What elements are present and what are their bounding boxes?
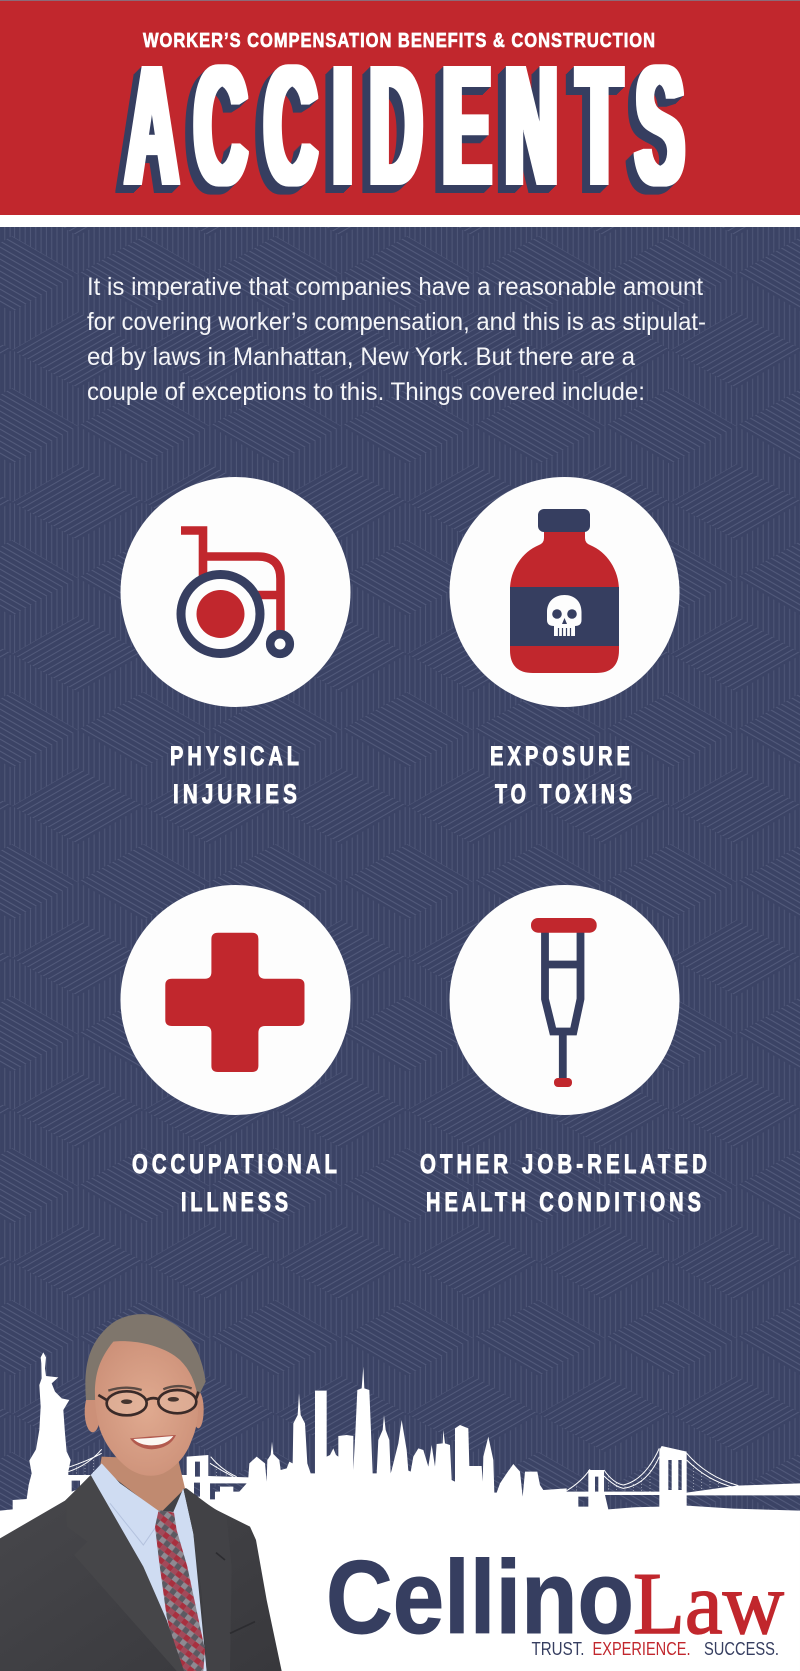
circle: exposure to toxins [450, 477, 680, 707]
pocket and notch [216, 1553, 255, 1633]
left lapel [66, 1475, 184, 1671]
intro paragraph: for covering worker’s compensation, and this is as stipulat- [87, 308, 706, 336]
label: other conditions: OTHER JOB-RELATED [420, 1149, 711, 1179]
panel: exposure to toxins [450, 477, 680, 809]
header band [0, 0, 800, 227]
tagline: SUCCESS. [704, 1638, 779, 1659]
icon: skull [547, 595, 582, 636]
label: occupational illness: OCCUPATIONAL [132, 1149, 341, 1179]
face [95, 1341, 198, 1476]
logo: Cellino Law [326, 1540, 784, 1659]
teeth [133, 1436, 173, 1445]
label: physical injuries: PHYSICAL [170, 741, 303, 771]
intro paragraph: couple of exceptions to this. Things covered include: [87, 378, 645, 406]
suit [0, 1475, 282, 1671]
hair [85, 1314, 206, 1400]
intro paragraph [87, 273, 706, 406]
circle: physical injuries [120, 477, 350, 707]
title: ACCIDENTS: ACCIDENTS [126, 31, 684, 220]
eyes [121, 1397, 179, 1404]
right lapel [183, 1488, 232, 1671]
label: physical injuries [170, 741, 303, 809]
circle: other conditions [450, 885, 680, 1115]
icon: medical cross [165, 933, 304, 1072]
glasses [98, 1390, 198, 1415]
neck [100, 1457, 185, 1513]
icon: poison bottle [510, 509, 619, 673]
collar edge [110, 1503, 156, 1545]
label: other conditions [420, 1149, 711, 1217]
icon: wheelchair [181, 530, 290, 654]
shirt [91, 1463, 207, 1671]
tie [155, 1510, 205, 1671]
ear left [85, 1391, 101, 1432]
panel: other job-related health conditions [420, 885, 711, 1217]
wordmark Law: Law [633, 1556, 784, 1653]
portrait: attorney illustration [0, 1314, 282, 1671]
circle: occupational illness [120, 885, 350, 1115]
label: other conditions: HEALTH CONDITIONS [426, 1187, 705, 1217]
icon: crutch [531, 918, 597, 1087]
label: exposure to toxins: TO TOXINS [495, 779, 636, 809]
label: occupational illness: ILLNESS [181, 1187, 292, 1217]
tagline: EXPERIENCE. [592, 1638, 690, 1659]
wordmark Cellino: Cellino [326, 1540, 634, 1656]
mouth [130, 1435, 176, 1449]
label: exposure to toxins [490, 741, 636, 809]
intro paragraph: It is imperative that companies have a reasonable amount [87, 273, 703, 301]
panel: occupational illness [120, 885, 350, 1217]
label: physical injuries: INJURIES [173, 779, 301, 809]
intro paragraph: ed by laws in Manhattan, New York. But there are a [87, 343, 635, 371]
subtitle: WORKER’S COMPENSATION BENEFITS & CONSTRUCTION [143, 30, 656, 52]
skyline silhouette [0, 1352, 800, 1671]
tagline [532, 1638, 779, 1659]
tagline: TRUST. [532, 1638, 584, 1659]
label: occupational illness [132, 1149, 341, 1217]
label: exposure to toxins: EXPOSURE [490, 741, 634, 771]
panel: physical injuries [120, 477, 350, 809]
eyebrows [108, 1386, 192, 1391]
ear right [193, 1392, 204, 1428]
